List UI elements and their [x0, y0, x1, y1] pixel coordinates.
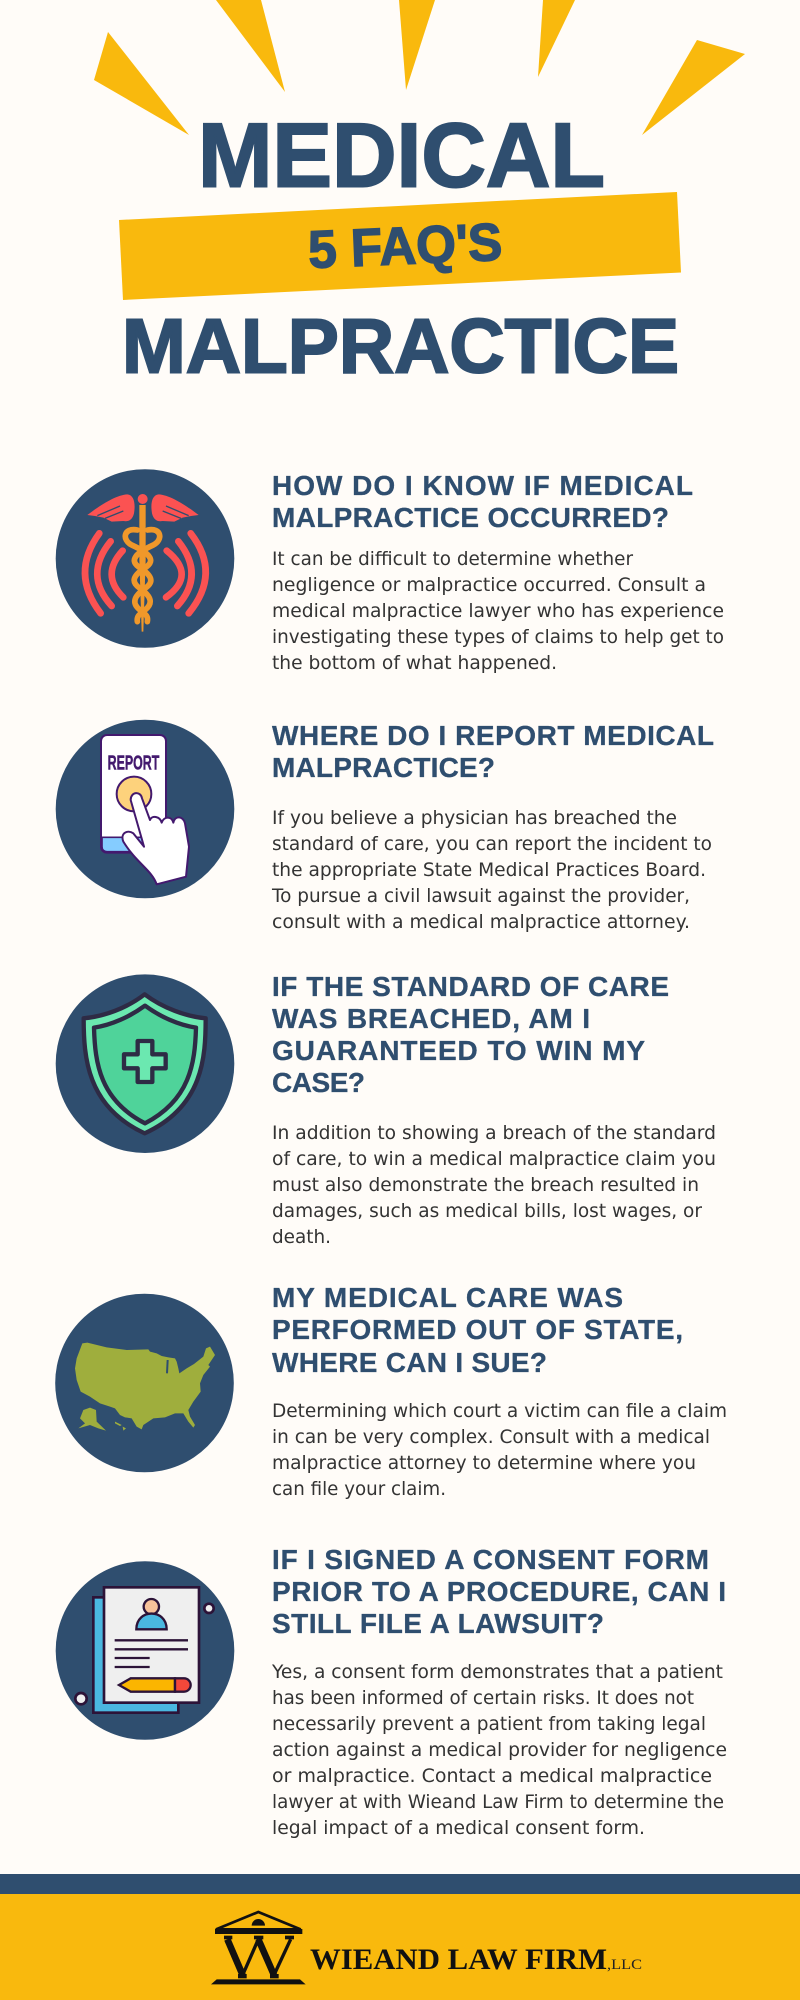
text block: investigating these types of claims to help get to	[272, 626, 724, 648]
text block: action against a medical provider for negligence	[272, 1739, 727, 1761]
panel: FAQ 5	[56, 1544, 727, 1839]
icon: consent form	[56, 1561, 234, 1740]
text block: has been informed of certain risks. It does not	[272, 1687, 694, 1709]
heading	[272, 971, 669, 1098]
heading	[272, 1544, 726, 1639]
heading: IF I SIGNED A CONSENT FORM	[272, 1544, 709, 1575]
heading	[272, 1282, 683, 1378]
text block	[271, 1661, 727, 1839]
text block: the bottom of what happened.	[272, 652, 557, 674]
text block: It can be difficult to determine whether	[272, 548, 633, 570]
heading	[272, 470, 693, 533]
icon: report button: REPORT	[108, 752, 159, 774]
title: MEDICAL: MEDICAL	[198, 106, 605, 206]
text block: Yes, a consent form demonstrates that a patient	[271, 1661, 723, 1683]
icon: law firm logo	[211, 1912, 306, 1984]
text block: the appropriate State Medical Practices Board.	[272, 859, 706, 881]
title: MALPRACTICE: MALPRACTICE	[122, 304, 679, 390]
text block: medical malpractice lawyer who has experience	[272, 600, 724, 622]
heading: WAS BREACHED, AM I	[272, 1003, 590, 1034]
icon: caduceus	[56, 469, 234, 648]
text block: malpractice attorney to determine where you	[272, 1452, 696, 1474]
icon: medical shield	[56, 974, 234, 1153]
text block: can file your claim.	[272, 1478, 446, 1500]
heading: IF THE STANDARD OF CARE	[272, 971, 669, 1002]
text block: legal impact of a medical consent form.	[272, 1817, 645, 1839]
text block	[271, 807, 712, 933]
panel: FAQ 2	[56, 720, 714, 933]
text block: consult with a medical malpractice attorney.	[272, 911, 690, 933]
text block: in can be very complex. Consult with a medical	[272, 1426, 710, 1448]
panel: FAQ 1	[56, 469, 724, 674]
text block: If you believe a physician has breached the	[272, 807, 677, 829]
heading: CASE?	[272, 1067, 365, 1098]
text block	[272, 548, 724, 674]
heading: PRIOR TO A PROCEDURE, CAN I	[272, 1576, 726, 1607]
heading: WHERE DO I REPORT MEDICAL	[272, 720, 714, 751]
text block: or malpractice. Contact a medical malpractice	[272, 1765, 712, 1787]
decorative burst rays	[94, 0, 745, 135]
heading	[272, 720, 714, 783]
text block: damages, such as medical bills, lost wages, or	[272, 1200, 702, 1222]
icon: report button	[56, 720, 234, 898]
footer	[0, 1874, 800, 2000]
text block: standard of care, you can report the incident to	[272, 833, 712, 855]
heading: STILL FILE A LAWSUIT?	[272, 1608, 604, 1639]
heading: PERFORMED OUT OF STATE,	[272, 1314, 683, 1345]
text block	[272, 1122, 716, 1248]
firm name: WIEAND LAW FIRM	[310, 1943, 607, 1976]
text block: Determining which court a victim can file a claim	[272, 1400, 727, 1422]
heading: MY MEDICAL CARE WAS	[272, 1282, 623, 1313]
title band: 5 FAQ's	[119, 192, 681, 300]
firm suffix: ,LLC	[607, 1957, 642, 1973]
text block: negligence or malpractice occurred. Consult a	[272, 574, 706, 596]
text block: necessarily prevent a patient from taking legal	[272, 1713, 706, 1735]
text block: must also demonstrate the breach resulted in	[272, 1174, 699, 1196]
text block: death.	[272, 1226, 331, 1248]
heading: MALPRACTICE?	[272, 752, 495, 783]
text block: lawyer at with Wieand Law Firm to determine the	[272, 1791, 724, 1813]
title band: 5 FAQ's: 5 FAQ'S	[307, 213, 503, 280]
text block: In addition to showing a breach of the standard	[272, 1122, 716, 1144]
panel: FAQ 3	[56, 971, 716, 1248]
heading: GUARANTEED TO WIN MY	[272, 1035, 645, 1066]
text block	[272, 1400, 727, 1500]
text block: of care, to win a medical malpractice claim you	[272, 1148, 716, 1170]
text block: To pursue a civil lawsuit against the provider,	[271, 885, 690, 907]
panel: FAQ 4	[55, 1282, 727, 1500]
icon: United States map	[55, 1294, 234, 1472]
heading: HOW DO I KNOW IF MEDICAL	[272, 470, 693, 501]
heading: MALPRACTICE OCCURRED?	[272, 502, 669, 533]
heading: WHERE CAN I SUE?	[272, 1347, 547, 1378]
